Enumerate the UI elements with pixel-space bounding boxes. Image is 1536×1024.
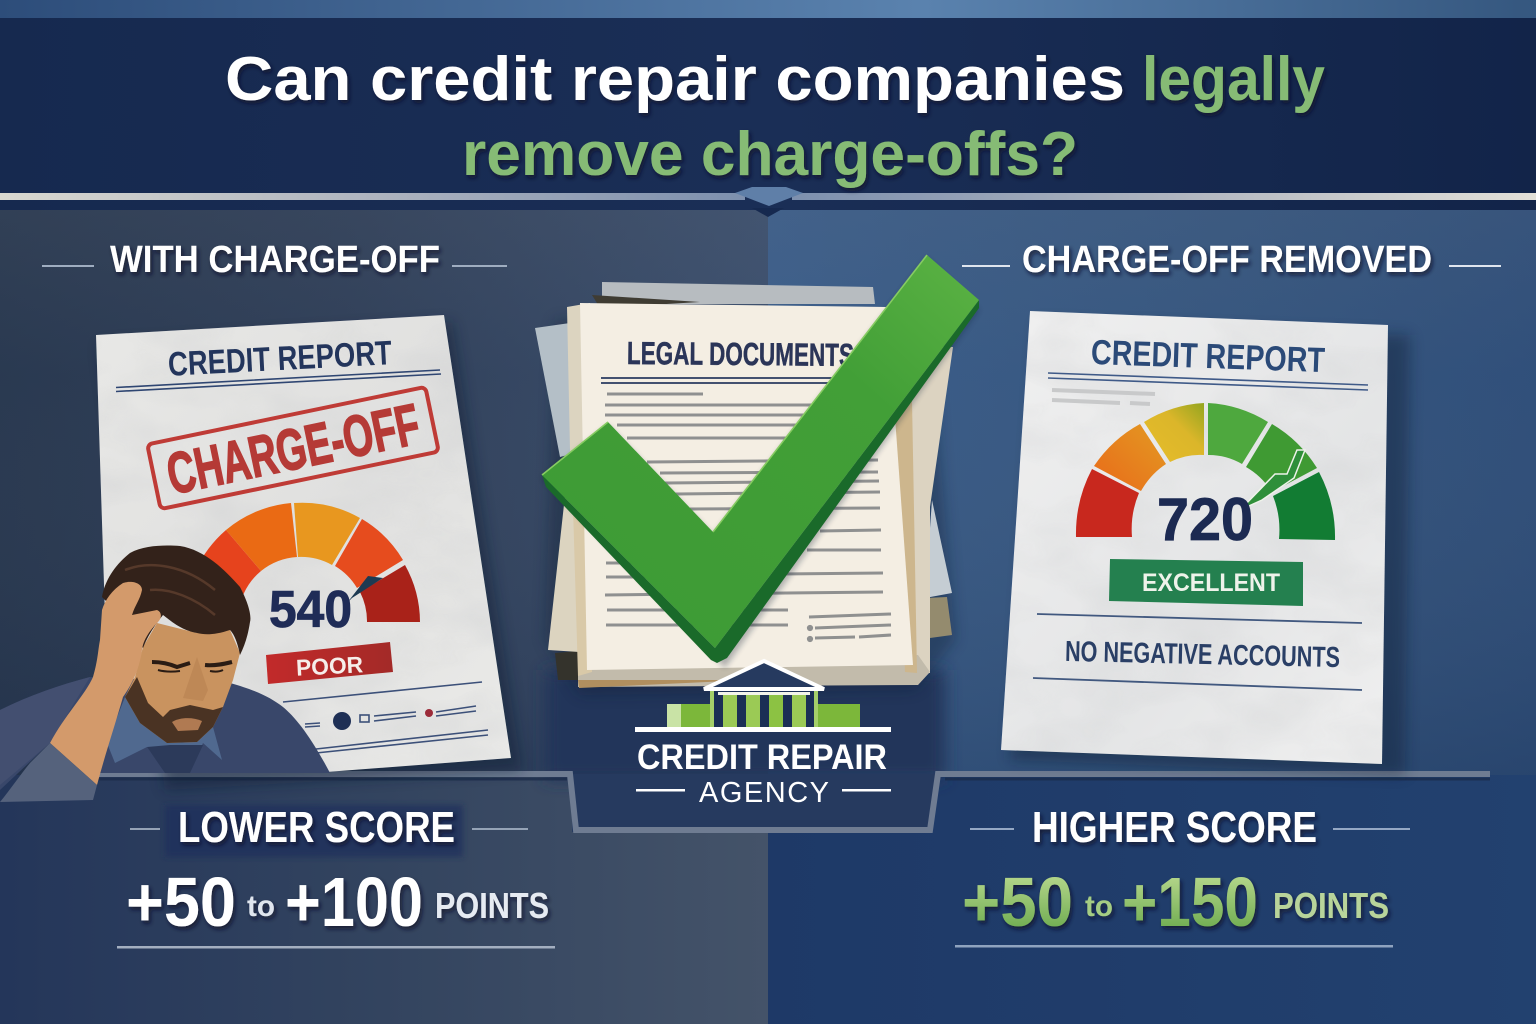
higher score points range: +50 xyxy=(962,863,1073,941)
legal documents heading: LEGAL DOCUMENTS xyxy=(627,335,854,373)
title banner xyxy=(0,18,1536,217)
panel: right credit report xyxy=(995,305,1410,775)
face xyxy=(125,623,240,743)
lower score points range: +100 xyxy=(285,863,423,941)
panel: logo backing xyxy=(95,670,1490,832)
icon: green check mark xyxy=(542,255,979,668)
illustration: stressed man xyxy=(0,546,330,802)
higher score points range: +150 xyxy=(1122,863,1258,941)
sleeve cuff xyxy=(0,743,97,802)
title text xyxy=(225,45,1325,189)
higher score points range: POINTS xyxy=(1273,885,1389,926)
arm and hand xyxy=(50,582,161,785)
panel: higher score xyxy=(955,803,1410,948)
lower score points range: POINTS xyxy=(435,885,549,926)
title text: legally xyxy=(1142,45,1325,114)
lower score points range: to xyxy=(247,890,275,923)
panel: higher score: HIGHER SCORE xyxy=(1032,803,1317,852)
logo: credit repair agency: AGENCY xyxy=(699,777,829,809)
charge-off stamp: CHARGE-OFF xyxy=(161,392,425,507)
poor badge xyxy=(266,642,393,684)
poor badge: POOR xyxy=(295,651,364,681)
eyes and brows xyxy=(152,662,232,667)
right heading: CHARGE-OFF REMOVED xyxy=(1022,239,1432,281)
higher score points range: to xyxy=(1085,890,1113,923)
left report heading: CREDIT REPORT xyxy=(167,334,393,384)
logo: credit repair agency xyxy=(635,661,891,809)
gauge: score 540: 540 xyxy=(269,581,352,639)
right report heading: CREDIT REPORT xyxy=(1090,333,1326,380)
excellent badge: EXCELLENT xyxy=(1142,569,1280,597)
document text lines xyxy=(605,394,891,641)
collar xyxy=(107,697,222,772)
no negative accounts text: NO NEGATIVE ACCOUNTS xyxy=(1065,636,1340,674)
shirt xyxy=(0,677,330,790)
panel: legal documents stack xyxy=(535,282,955,695)
nose shadow xyxy=(183,657,208,701)
title text: remove charge-offs? xyxy=(462,120,1078,189)
report footer lines and icons xyxy=(283,682,488,753)
charge-off stamp xyxy=(147,387,439,510)
title text: Can credit repair companies xyxy=(225,45,1125,114)
panel: lower score xyxy=(117,803,555,948)
beard xyxy=(125,677,223,743)
lower score points range: +50 xyxy=(126,863,236,941)
panel: left credit report xyxy=(90,310,522,790)
left heading: WITH CHARGE-OFF xyxy=(110,239,440,281)
hair xyxy=(102,546,250,655)
gauge: score 540 xyxy=(185,503,420,639)
panel: lower score: LOWER SCORE xyxy=(178,803,455,852)
lower score points range xyxy=(126,863,549,941)
excellent badge xyxy=(1109,559,1303,606)
logo: credit repair agency: CREDIT REPAIR xyxy=(637,738,887,777)
gauge: score 720 xyxy=(1076,403,1335,553)
gauge: score 720: 720 xyxy=(1157,486,1253,553)
higher score points range xyxy=(962,863,1389,941)
